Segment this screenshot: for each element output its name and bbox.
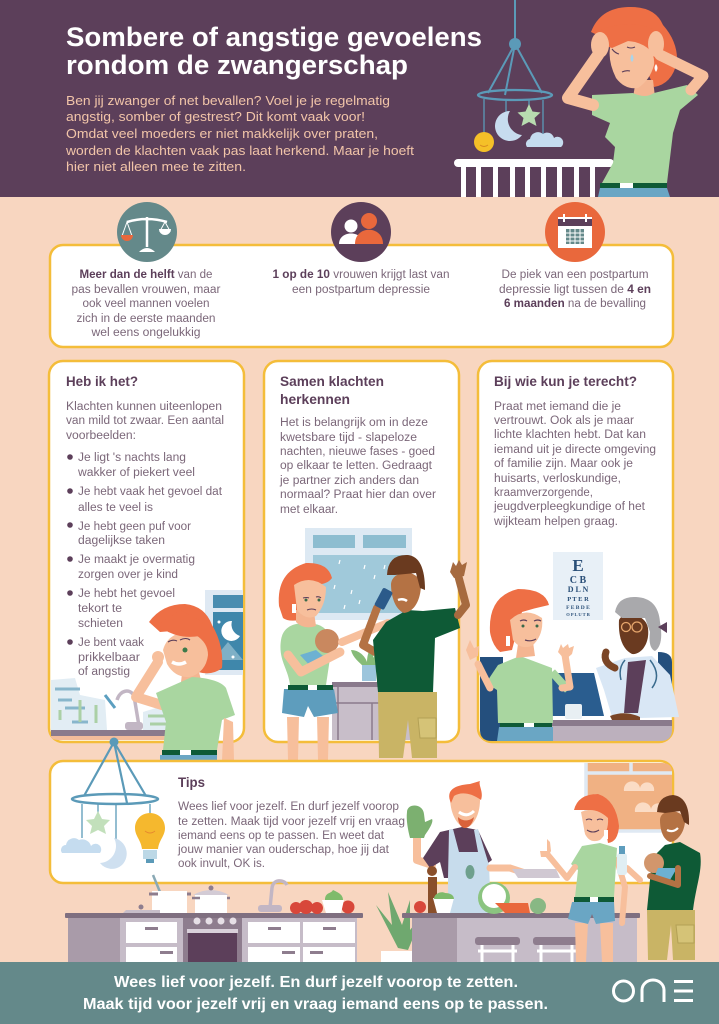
intro text: Ben jij zwanger of net bevallen? Voel je je regelmatig xyxy=(66,93,390,108)
illustration: worried woman xyxy=(568,7,703,197)
stools xyxy=(475,937,580,962)
text: meer dan de helft: Meer dan de helft van de xyxy=(80,269,212,281)
text block: nachten, nieuwe fases - goed xyxy=(280,446,435,458)
footer message xyxy=(83,974,548,1013)
illustration: eye chart: P T E R xyxy=(567,596,589,603)
illustration: woman with baby xyxy=(279,563,388,760)
illustration: plant xyxy=(376,892,423,962)
title xyxy=(66,22,482,80)
panel: statistics xyxy=(50,202,673,347)
heading: Bij wie kun je terecht? xyxy=(494,373,637,389)
bullet list: alles te veel is xyxy=(78,502,153,514)
illustration: kitchen window xyxy=(586,763,672,832)
illustration: eye chart: D L N xyxy=(568,585,588,594)
text block: Het is belangrijk om in deze xyxy=(280,417,428,429)
text: meer dan de helft xyxy=(72,269,221,339)
faucet xyxy=(258,881,287,912)
bullet list: wakker of piekert veel xyxy=(77,467,195,479)
icon: two people xyxy=(331,202,391,262)
bullet list: Je hebt vaak het gevoel dat xyxy=(78,486,223,498)
icon: baby mobile xyxy=(474,0,563,152)
text block: op elkaar te letten. Gedraagt xyxy=(280,460,433,472)
intro text: worden de klachten vaak pas laat herkend. Maar je hoeft xyxy=(65,143,414,158)
text block: vertrouwt. Ook als je maar xyxy=(494,415,634,427)
text: 1 op de 10: 1 op de 10 vrouwen krijgt last van xyxy=(272,269,450,281)
text: piek: De piek van een postpartum xyxy=(502,269,648,281)
icon: balance scale xyxy=(117,202,177,262)
bullet list: Je maakt je overmatig xyxy=(78,554,195,566)
icon: calendar xyxy=(545,202,605,262)
heading xyxy=(280,373,384,407)
bullet list: dagelijkse taken xyxy=(78,535,165,547)
illustration: right kitchen island xyxy=(402,913,640,962)
text block: of familie zijn. Maar ook je xyxy=(494,458,633,470)
illustration: counter and plant xyxy=(332,646,410,740)
bullet list: zorgen over je kind xyxy=(78,569,178,581)
footer message: Wees lief voor jezelf. En durf jezelf voorop te zetten. xyxy=(114,974,518,991)
footer message: Maak tijd voor jezelf vrij en vraag iemand eens op te passen. xyxy=(83,996,548,1013)
text: piek xyxy=(499,269,651,310)
illustration: man with baby xyxy=(644,795,701,960)
text block: lichte klachten hebt. Dat kan xyxy=(494,429,646,441)
panel: Bij wie kun je terecht? xyxy=(466,361,679,742)
text block: Praat met iemand die je xyxy=(494,401,621,413)
text: meer dan de helft: wel eens ongelukkig xyxy=(90,327,200,339)
illustration: man on phone xyxy=(363,555,467,758)
illustration: doctor desk xyxy=(480,652,672,741)
intro text: hier niet alleen mee te zitten. xyxy=(66,159,246,174)
intro text: angstig, somber of gestrest? Dit komt vaak voor! xyxy=(66,109,365,124)
text: meer dan de helft: zich in de eerste maanden xyxy=(76,313,216,325)
text block: iemand eens op te passen. En weet dat xyxy=(178,830,385,842)
text block xyxy=(279,417,436,516)
illustration: eye chart: E xyxy=(572,556,584,575)
illustration: night window xyxy=(205,590,243,675)
illustration: rainy window xyxy=(305,528,412,620)
intro text xyxy=(65,93,414,174)
text block: Wees lief voor jezelf. En durf jezelf voorop xyxy=(178,801,399,813)
illustration: left kitchen xyxy=(65,875,363,962)
illustration: vegetables on island xyxy=(414,882,546,914)
text block: kraamverzorgende, xyxy=(494,487,593,499)
text: intro: voorbeelden: xyxy=(66,430,136,442)
text block: je partner zich anders dan xyxy=(279,475,419,487)
text block xyxy=(177,801,405,870)
bullet list: tekort te xyxy=(78,603,122,615)
illustration: woman talking xyxy=(466,589,574,741)
panel: tips xyxy=(50,738,673,883)
panel: header xyxy=(0,0,719,197)
panel: Heb ik het? xyxy=(49,361,244,760)
bullet list: prikkelbaar xyxy=(78,652,140,664)
bullet list: of angstig xyxy=(78,666,130,678)
text block: ook invult, OK is. xyxy=(178,858,265,870)
text: meer dan de helft: pas bevallen vrouwen, maar xyxy=(72,284,221,296)
text: 1 op de 10 xyxy=(272,269,450,296)
text: intro: van mild tot zwaar. Een aantal xyxy=(66,415,224,427)
text block: met elkaar. xyxy=(280,504,338,516)
text block: huisarts, verloskundige, xyxy=(494,473,621,485)
illustration: woman with thumbs up xyxy=(540,794,640,962)
text block: te zetten. Maak tijd voor jezelf vrij en vraag xyxy=(178,816,405,828)
heading: Heb ik het? xyxy=(66,373,138,389)
illustration: eye chart xyxy=(553,552,603,620)
bullet list: Je hebt geen puf voor xyxy=(78,521,191,533)
panel: footer xyxy=(0,962,719,1024)
panel: Samen klachten herkennen xyxy=(264,361,467,760)
title: Sombere of angstige gevoelens xyxy=(66,22,482,52)
text block xyxy=(493,401,656,528)
illustration: chef xyxy=(407,781,560,913)
text block: jeugdverpleegkundige of het xyxy=(493,501,646,513)
text block: kwetsbare tijd - slapeloze xyxy=(280,432,417,444)
text: piek: 6 maanden na de bevalling xyxy=(504,298,646,310)
text block: normaal? Praat hier dan over xyxy=(280,489,436,501)
illustration: dishes and sink xyxy=(51,678,174,740)
text block: iemand uit je directe omgeving xyxy=(494,444,656,456)
bullet list: Je hebt het gevoel xyxy=(78,588,175,600)
logo xyxy=(614,980,693,1002)
text: meer dan de helft: ook veel mannen voelen xyxy=(82,298,210,310)
illustration: tired woman xyxy=(136,604,235,760)
text block: jouw manier van ouderschap, hoe jij dat xyxy=(177,844,390,856)
icon: mobile with bulb xyxy=(61,738,165,869)
bullet list xyxy=(67,452,223,678)
text: piek: depressie ligt tussen de 4 en xyxy=(499,284,651,296)
text: 1 op de 10: een postpartum depressie xyxy=(292,284,430,296)
illustration: eye chart: C B xyxy=(570,575,587,586)
heading: herkennen xyxy=(280,391,350,407)
illustration: eye chart: O P L U T B xyxy=(566,612,590,617)
heading: Tips xyxy=(178,774,205,790)
heading: Samen klachten xyxy=(280,373,384,389)
bullet list: Je bent vaak xyxy=(78,637,144,649)
text block: wijkteam helpen graag. xyxy=(493,516,618,528)
intro text: Omdat veel moeders er niet makkelijk over praten, xyxy=(66,126,378,141)
vegetables xyxy=(290,890,354,914)
bullet list: schieten xyxy=(78,618,123,630)
text: intro xyxy=(66,401,224,442)
bullet list: Je ligt 's nachts lang xyxy=(78,452,186,464)
pots xyxy=(123,875,230,913)
illustration: eye chart: F E B D E xyxy=(566,605,590,611)
text: intro: Klachten kunnen uiteenlopen xyxy=(66,401,222,413)
crib xyxy=(454,159,614,197)
illustration: doctor xyxy=(596,597,679,720)
title: rondom de zwangerschap xyxy=(66,50,408,80)
